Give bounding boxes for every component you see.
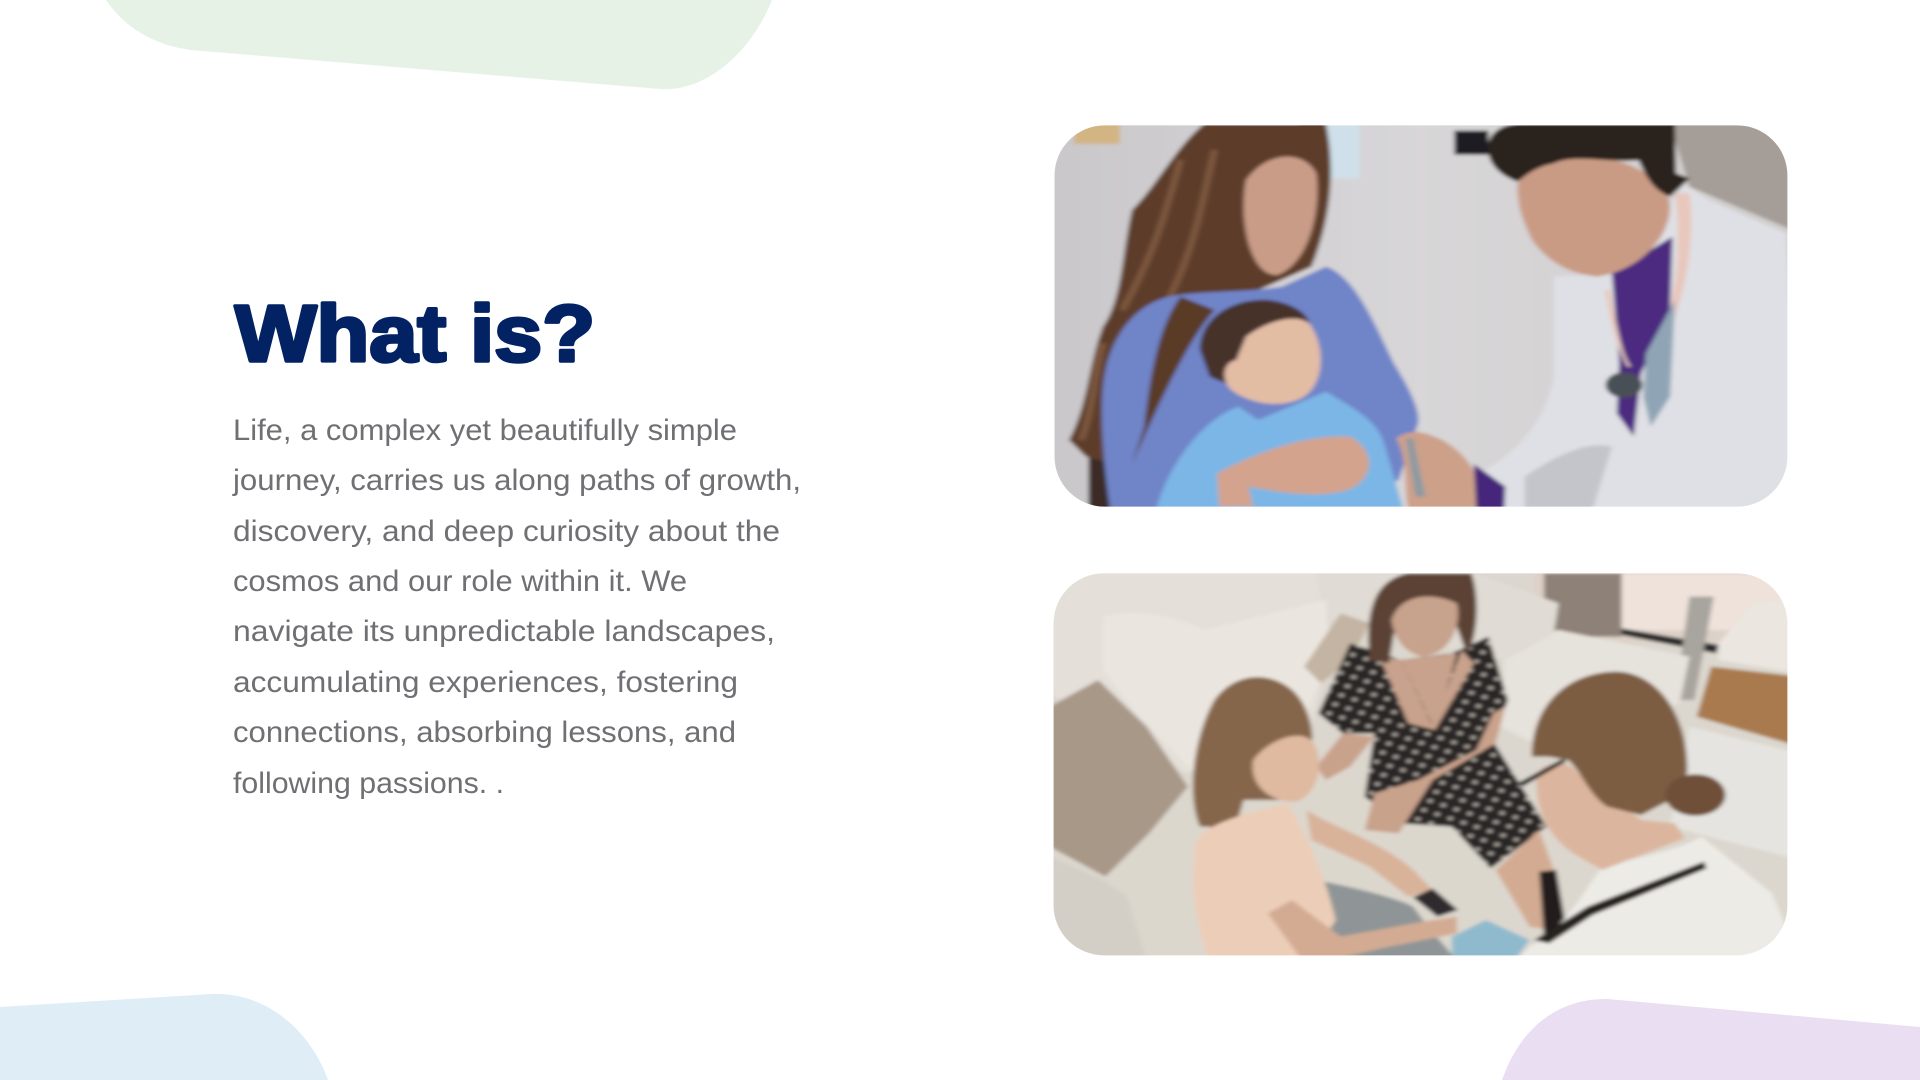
body paragraph: [232, 414, 801, 800]
photo: doctor visiting mother and girl: [1054, 573, 1788, 956]
body paragraph: discovery, and deep curiosity about the: [233, 515, 780, 548]
photo: doctor with mother and baby: [1054, 125, 1788, 507]
body paragraph: navigate its unpredictable landscapes,: [233, 615, 775, 648]
body paragraph: accumulating experiences, fostering: [233, 666, 738, 699]
blob: bottom-right purple: [1502, 999, 1920, 1080]
body paragraph: connections, absorbing lessons, and: [233, 716, 736, 749]
blob: bottom-left blue: [0, 994, 328, 1080]
body paragraph: cosmos and our role within it. We: [233, 565, 687, 598]
body paragraph: following passions. .: [233, 767, 504, 800]
body paragraph: Life, a complex yet beautifully simple: [233, 414, 737, 447]
body paragraph: journey, carries us along paths of growth,: [232, 464, 801, 497]
blob: top-left green: [106, 0, 772, 89]
title: What is?: [235, 289, 595, 378]
